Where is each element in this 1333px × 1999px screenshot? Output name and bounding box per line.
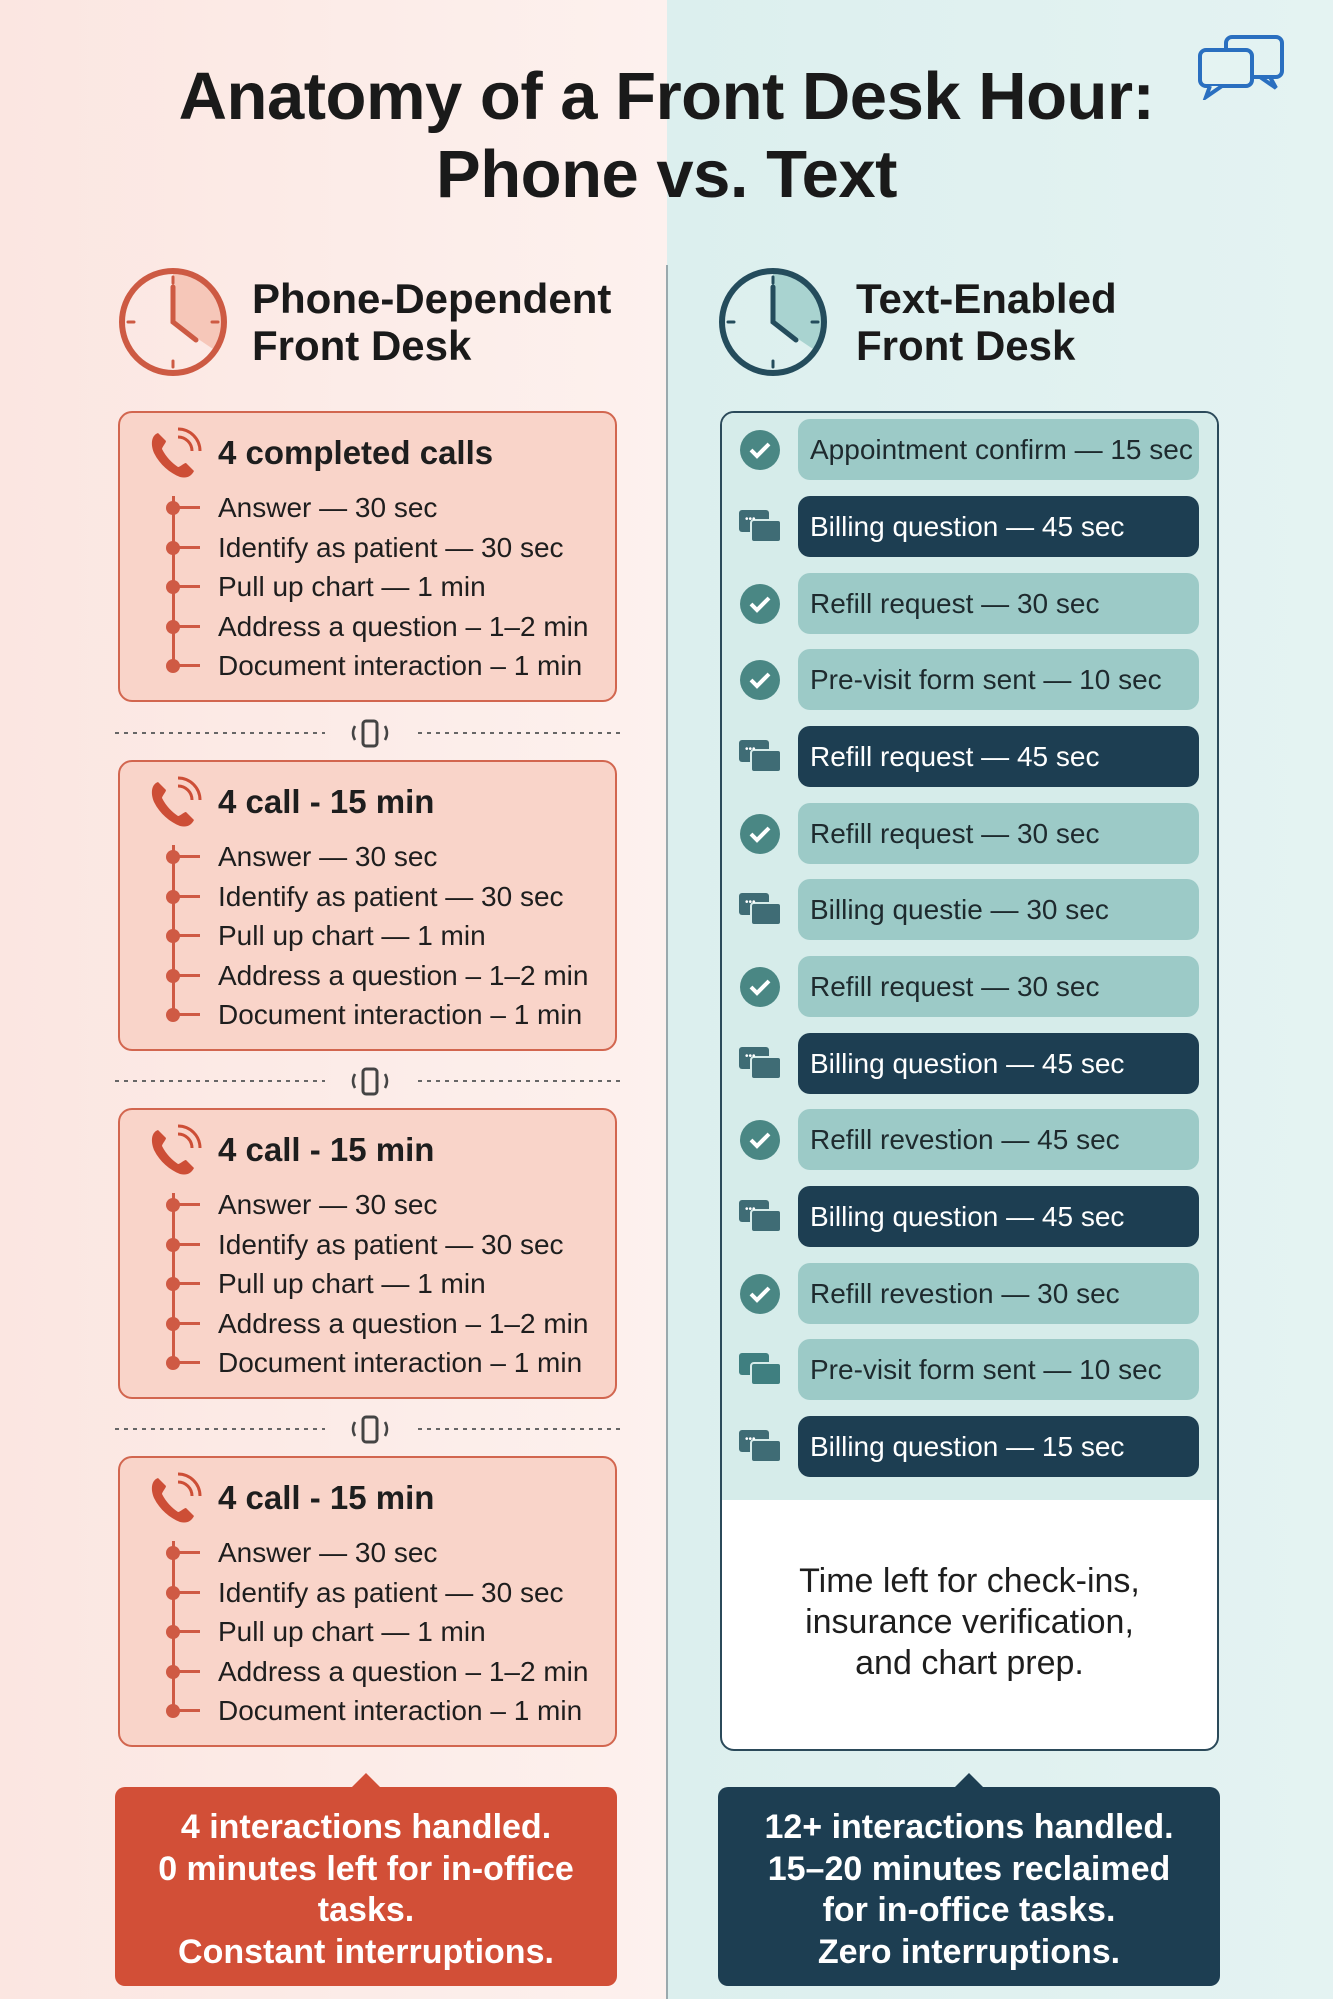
divider: interruption 2 <box>115 1068 620 1096</box>
divider: interruption 1 <box>115 720 620 748</box>
row 2: ••• <box>745 514 756 525</box>
row 5 <box>739 726 1199 787</box>
row 14: Billing question — 15 sec <box>810 1431 1124 1462</box>
panel: call 3: Answer — 30 sec <box>218 1189 437 1220</box>
title: Phone vs. Text <box>436 137 897 212</box>
panel: call 3: Document interaction – 1 min <box>218 1347 582 1378</box>
panel: call 1: 4 completed calls <box>218 434 493 471</box>
text: time left: insurance verification, <box>805 1603 1134 1641</box>
panel: call 2: 4 call - 15 min <box>218 783 434 820</box>
row 8 <box>740 956 1199 1017</box>
row 12: Refill revestion — 30 sec <box>810 1278 1120 1309</box>
row 6: Refill request — 30 sec <box>810 818 1099 849</box>
divider: interruption 3 <box>115 1416 620 1444</box>
panel: call 3: Pull up chart — 1 min <box>218 1268 486 1299</box>
row 5: ••• <box>745 744 756 755</box>
heading: phone-dependent <box>252 275 611 369</box>
panel: call 2: Address a question – 1–2 min <box>218 960 588 991</box>
text: time left <box>799 1562 1140 1682</box>
row 7 <box>739 879 1199 940</box>
row 4 <box>740 649 1199 710</box>
row 2 <box>739 496 1199 557</box>
title <box>179 59 1154 212</box>
panel: call 4: Document interaction – 1 min <box>218 1695 582 1726</box>
panel: call 1: Answer — 30 sec <box>218 492 437 523</box>
icon: phone clock <box>119 268 227 376</box>
row 13 <box>739 1339 1199 1400</box>
row 12 <box>740 1263 1199 1324</box>
summary: phone: 4 interactions handled. <box>181 1808 551 1846</box>
row 1 <box>740 419 1199 480</box>
summary: phone: 0 minutes left for in-office <box>158 1850 574 1888</box>
summary: text: 15–20 minutes reclaimed <box>768 1850 1170 1888</box>
heading: text-enabled: Text-Enabled <box>856 275 1117 322</box>
panel: call 3: Address a question – 1–2 min <box>218 1308 588 1339</box>
row 3: Refill request — 30 sec <box>810 588 1099 619</box>
row 10: Refill revestion — 45 sec <box>810 1124 1120 1155</box>
summary: text: for in-office tasks. <box>823 1891 1115 1929</box>
row 10 <box>740 1109 1199 1170</box>
panel: call 2: Document interaction – 1 min <box>218 999 582 1030</box>
summary: phone: Constant interruptions. <box>178 1932 554 1970</box>
row 7: Billing questie — 30 sec <box>810 894 1109 925</box>
row 11: ••• <box>745 1204 756 1215</box>
heading: text-enabled: Front Desk <box>856 322 1075 369</box>
icon: text clock <box>719 268 827 376</box>
panel: call 4: Pull up chart — 1 min <box>218 1616 486 1647</box>
row 9: ••• <box>745 1051 756 1062</box>
row 4: Pre-visit form sent — 10 sec <box>810 664 1162 695</box>
panel: call 4: Address a question – 1–2 min <box>218 1656 588 1687</box>
row 2: Billing question — 45 sec <box>810 511 1124 542</box>
panel: call 3: Identify as patient — 30 sec <box>218 1229 564 1260</box>
row 11: Billing question — 45 sec <box>810 1201 1124 1232</box>
summary: phone: tasks. <box>318 1891 414 1929</box>
summary: text: Zero interruptions. <box>818 1932 1120 1970</box>
panel: call 1: Document interaction – 1 min <box>218 650 582 681</box>
panel: text messages <box>720 411 1219 1751</box>
panel: call 1 <box>118 411 617 702</box>
text: time left: and chart prep. <box>855 1644 1084 1682</box>
row 9 <box>739 1033 1199 1094</box>
row 1: Appointment confirm — 15 sec <box>810 434 1193 465</box>
panel: call 2: Identify as patient — 30 sec <box>218 881 564 912</box>
panel: call 2: Pull up chart — 1 min <box>218 920 486 951</box>
panel: call 2 <box>118 760 617 1051</box>
row 5: Refill request — 45 sec <box>810 741 1099 772</box>
panel: call 4: 4 call - 15 min <box>218 1479 434 1516</box>
row 13: Pre-visit form sent — 10 sec <box>810 1354 1162 1385</box>
panel: call 4 <box>118 1456 617 1747</box>
summary: phone <box>115 1787 617 1986</box>
row 9: Billing question — 45 sec <box>810 1048 1124 1079</box>
panel: call 3 <box>118 1108 617 1399</box>
icon: chat bubbles <box>1198 35 1284 100</box>
heading: text-enabled <box>856 275 1117 369</box>
row 7: ••• <box>745 897 756 908</box>
panel: call 3: 4 call - 15 min <box>218 1131 434 1168</box>
panel: call 4: Answer — 30 sec <box>218 1537 437 1568</box>
panel: call 4: Identify as patient — 30 sec <box>218 1577 564 1608</box>
panel: call 1: Address a question – 1–2 min <box>218 611 588 642</box>
heading: phone-dependent: Front Desk <box>252 322 471 369</box>
text: time left: Time left for check-ins, <box>799 1562 1140 1600</box>
row 11 <box>739 1186 1199 1247</box>
panel: call 1: Pull up chart — 1 min <box>218 571 486 602</box>
row 14 <box>739 1416 1199 1477</box>
row 8: Refill request — 30 sec <box>810 971 1099 1002</box>
panel: call 2: Answer — 30 sec <box>218 841 437 872</box>
title: Anatomy of a Front Desk Hour: <box>179 59 1154 134</box>
summary: text: 12+ interactions handled. <box>764 1808 1174 1846</box>
row 3 <box>740 573 1199 634</box>
heading: phone-dependent: Phone-Dependent <box>252 275 611 322</box>
summary: text <box>718 1787 1220 1986</box>
row 14: ••• <box>745 1434 756 1445</box>
panel: call 1: Identify as patient — 30 sec <box>218 532 564 563</box>
row 6 <box>740 803 1199 864</box>
